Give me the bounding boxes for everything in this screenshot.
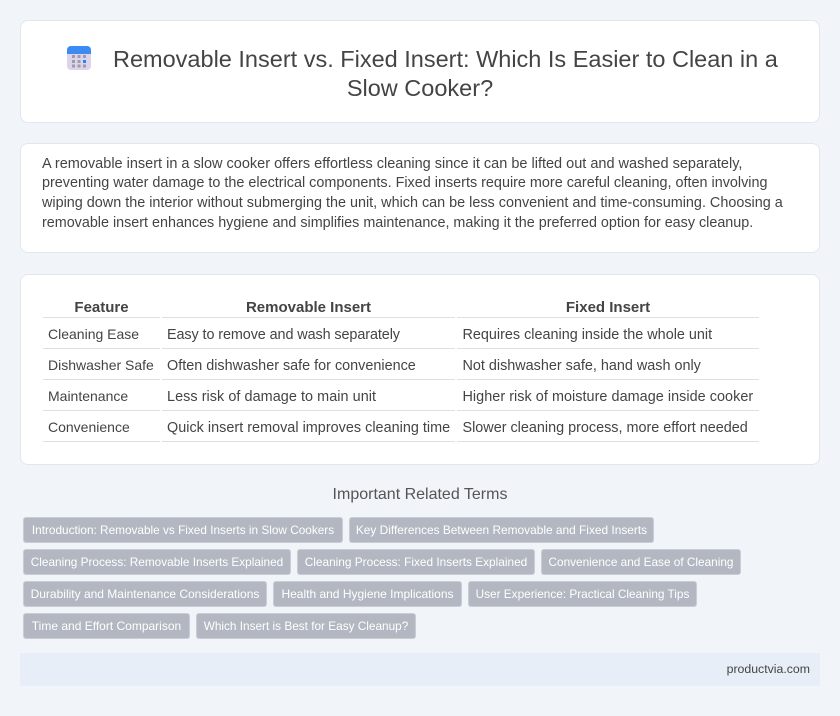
chip [196,613,416,639]
chip: User Experience: Practical Cleaning Tips [476,587,689,601]
table: comparison [43,299,759,442]
footer: source: productvia.com [727,662,810,676]
row: Maintenance [43,388,759,411]
header: Fixed Insert: Fixed Insert [566,299,650,316]
chip: Durability and Maintenance Considerations [31,587,259,601]
row: Dishwasher Safe: Dishwasher Safe [48,357,154,373]
text block: summary: preventing water damage to the electrical components. Fixed inserts require more careful cleaning, often involving [42,175,768,191]
panel: header [20,20,820,123]
text block: summary: wiping down the interior without submerging the unit, which can be less convenient and time-consuming. Choosing a [42,195,783,211]
row: Dishwasher Safe: Often dishwasher safe for convenience [167,358,416,374]
title [113,46,778,101]
chips: related terms [23,517,741,639]
chip [349,517,654,543]
chip: Introduction: Removable vs Fixed Inserts in Slow Cookers [32,523,334,537]
icon: calendar grid [67,46,91,70]
row: Convenience: Convenience [48,419,130,435]
header: Feature: Feature [74,299,129,316]
title: Slow Cooker? [347,75,493,101]
chip: Time and Effort Comparison [32,619,181,633]
row: Convenience: Quick insert removal improves cleaning time [167,420,450,436]
chip [541,549,741,575]
chip [23,549,291,575]
row: Cleaning Ease: Cleaning Ease [48,326,139,342]
row: Dishwasher Safe [43,357,759,380]
chip [23,517,343,543]
text block: summary: A removable insert in a slow cooker offers effortless cleaning since it can be lifted out and washed separately, [42,156,742,172]
chip [297,549,535,575]
chip: Which Insert is Best for Easy Cleanup? [204,619,408,633]
header: Removable Insert: Removable Insert [246,299,371,316]
row: Maintenance: Maintenance [48,388,128,404]
heading: related terms: Important Related Terms [333,486,507,503]
chip [273,581,462,607]
chip: Convenience and Ease of Cleaning [549,555,733,569]
row: Convenience: Slower cleaning process, more effort needed [462,420,748,436]
panel: summary paragraph [20,143,820,253]
panel: comparison table [20,274,820,465]
chip: Health and Hygiene Implications [281,587,454,601]
row: Cleaning Ease: Requires cleaning inside the whole unit [462,327,712,343]
row: Maintenance: Less risk of damage to main unit [167,389,376,405]
row: Cleaning Ease [43,326,759,349]
text block: summary: removable insert enhances hygiene and simplifies maintenance, making it the preferred option for easy cleanup. [42,215,753,231]
chip: Key Differences Between Removable and Fixed Inserts [356,523,647,537]
chip [468,581,697,607]
row: Cleaning Ease: Easy to remove and wash separately [167,327,400,343]
row: Maintenance: Higher risk of moisture damage inside cooker [462,389,753,405]
footer bar [20,653,820,686]
chip: Cleaning Process: Fixed Inserts Explained [305,555,527,569]
chip [23,581,267,607]
text block: summary [42,156,783,231]
chip: Cleaning Process: Removable Inserts Explained [31,555,283,569]
row: Dishwasher Safe: Not dishwasher safe, hand wash only [462,358,701,374]
title: Removable Insert vs. Fixed Insert: Which Is Easier to Clean in a [113,46,778,72]
chip [23,613,190,639]
row: Convenience [43,419,759,442]
